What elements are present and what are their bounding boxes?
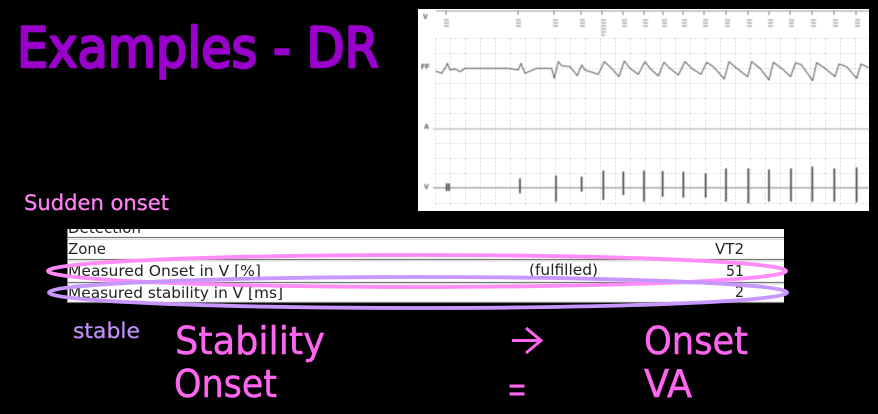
text: onset: Onset bbox=[174, 362, 277, 406]
text: stability: Stability bbox=[175, 319, 325, 363]
ECG grid bbox=[435, 38, 869, 206]
V ventricular trace bbox=[433, 187, 869, 189]
row: zone: VT2 bbox=[715, 240, 744, 258]
text: equals: = bbox=[507, 367, 527, 411]
text: VA: VA bbox=[644, 362, 692, 406]
row: measured stability: 2 bbox=[735, 283, 744, 301]
channel labels bbox=[421, 14, 430, 191]
ECG marker row bbox=[436, 11, 869, 35]
channel labels: A bbox=[424, 124, 429, 131]
label: sudden onset: Sudden onset bbox=[24, 191, 169, 215]
callout: stability ellipse bbox=[49, 277, 787, 308]
panel: ECG strip bbox=[418, 9, 869, 211]
row: zone bbox=[68, 240, 744, 258]
A atrial trace bbox=[433, 128, 869, 130]
row: measured stability: Measured stability in V [ms] bbox=[68, 284, 283, 302]
channel labels: V bbox=[423, 14, 428, 21]
row: measured onset: Measured Onset in V [%] bbox=[68, 262, 261, 280]
row: zone: Zone bbox=[68, 240, 106, 258]
label: stable: stable bbox=[73, 319, 140, 343]
row: measured onset: 51 bbox=[726, 262, 744, 280]
title: Examples - DR bbox=[17, 16, 379, 80]
callout: onset ellipse bbox=[48, 255, 786, 287]
arrow bbox=[512, 328, 541, 353]
text: onset result: Onset bbox=[644, 319, 748, 363]
FF far-field trace bbox=[436, 61, 869, 81]
clipped heading row: Detection bbox=[68, 219, 141, 237]
channel labels: FF bbox=[421, 64, 430, 71]
row: measured onset bbox=[68, 261, 744, 280]
channel labels: V bbox=[424, 184, 429, 191]
panel: measurements table bbox=[0, 219, 878, 303]
row: measured onset: (fulfilled) bbox=[529, 261, 598, 279]
row: measured stability bbox=[68, 283, 744, 302]
